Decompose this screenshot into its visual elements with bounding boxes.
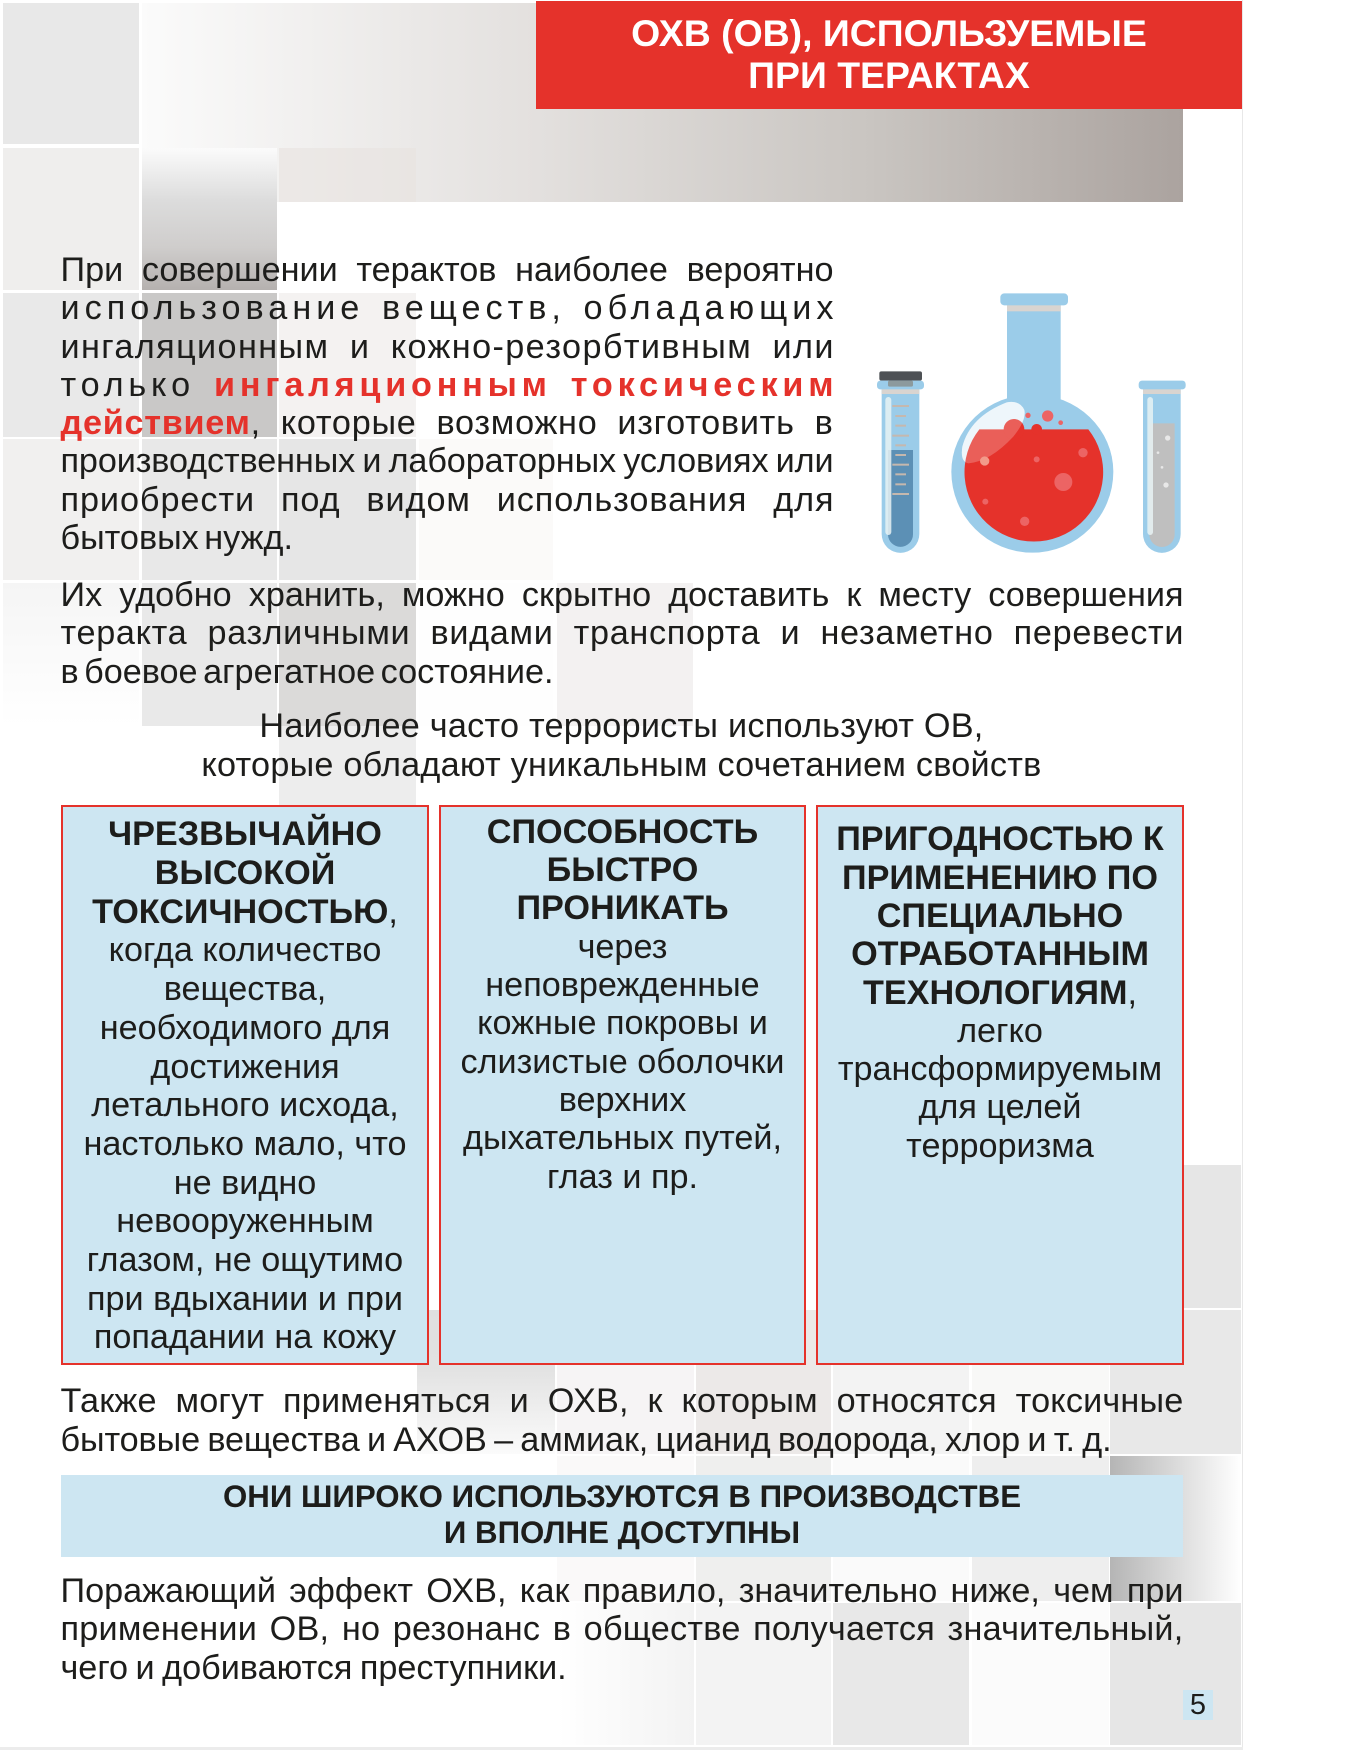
- intro paragraph: только ингаляционным токсическим: [60, 366, 838, 404]
- panel: extreme toxicity: при вдыхании и при: [87, 1280, 403, 1318]
- panel: extreme toxicity: необходимого для: [100, 1009, 390, 1047]
- closing paragraph: чего и добиваются преступники.: [60, 1649, 567, 1687]
- centered statement: [201, 707, 1042, 784]
- panel: suitability for use: трансформируемым: [838, 1050, 1162, 1088]
- panel: extreme toxicity: [61, 805, 429, 1365]
- panel: rapid penetration: БЫСТРО: [547, 851, 698, 889]
- panel: extreme toxicity: когда количество: [109, 931, 381, 969]
- panel: extreme toxicity: невооруженным: [116, 1202, 374, 1240]
- panel: rapid penetration: ПРОНИКАТЬ: [516, 889, 729, 927]
- panel: rapid penetration: кожные покровы и: [477, 1004, 768, 1042]
- panel: rapid penetration: слизистые оболочки: [460, 1043, 785, 1081]
- page number: [1183, 1690, 1213, 1720]
- title banner: ОХВ (ОВ), ИСПОЛЬЗУЕМЫЕ: [631, 12, 1147, 54]
- panel: suitability for use: ПРИГОДНОСТЬЮ К: [836, 820, 1164, 858]
- title banner: [536, 1, 1242, 109]
- page number: 5: [1190, 1689, 1206, 1721]
- household substances paragraph: бытовые вещества и АХОВ – аммиак, цианид водорода, хлор и т. д.: [60, 1421, 1112, 1459]
- panel: rapid penetration: верхних: [559, 1081, 686, 1119]
- intro paragraph: бытовых нужд.: [60, 519, 293, 557]
- intro paragraph: приобрести под видом использования для: [60, 481, 834, 519]
- icon: right test tube: [1139, 381, 1186, 553]
- panel: extreme toxicity: ВЫСОКОЙ: [155, 854, 335, 892]
- panel: extreme toxicity: вещества,: [164, 970, 326, 1008]
- household substances paragraph: Также могут применяться и ОХВ, к которым относятся токсичные: [60, 1382, 1184, 1420]
- centered statement: Наиболее часто террористы используют ОВ,: [259, 707, 984, 745]
- intro paragraph: производственных и лабораторных условиях или: [60, 442, 834, 480]
- storage paragraph: Их удобно хранить, можно скрытно доставить к месту совершения: [60, 576, 1184, 614]
- panel: rapid penetration: [439, 805, 806, 1365]
- storage paragraph: теракта различными видами транспорта и незаметно перевести: [60, 614, 1184, 652]
- panel: extreme toxicity: попадании на кожу: [94, 1318, 396, 1356]
- panel: suitability for use: СПЕЦИАЛЬНО: [877, 897, 1123, 935]
- intro paragraph: ингаляционным и кожно-резорбтивным или: [60, 328, 835, 366]
- icon: round flask with red liquid: [951, 293, 1113, 553]
- closing paragraph: применении ОВ, но резонанс в обществе получается значительный,: [60, 1610, 1184, 1648]
- icon: flask and test tubes: [877, 293, 1186, 553]
- intro paragraph: действием, которые возможно изготовить в: [60, 404, 834, 442]
- panel: suitability for use: для целей: [918, 1088, 1082, 1126]
- panel: suitability for use: легко: [957, 1012, 1043, 1050]
- callout banner: И ВПОЛНЕ ДОСТУПНЫ: [444, 1515, 800, 1550]
- storage paragraph: [60, 576, 1184, 691]
- panel: rapid penetration: через: [578, 928, 667, 966]
- household substances paragraph: [60, 1382, 1184, 1459]
- panel: rapid penetration: неповрежденные: [485, 966, 760, 1004]
- panel: extreme toxicity: глазом, не ощутимо: [87, 1241, 403, 1279]
- panel: suitability for use: ТЕХНОЛОГИЯМ,: [863, 974, 1137, 1012]
- intro paragraph: использование веществ, обладающих: [60, 289, 838, 327]
- panel: rapid penetration: глаз и пр.: [547, 1158, 698, 1196]
- panel: suitability for use: [816, 805, 1184, 1365]
- panel: extreme toxicity: не видно: [174, 1164, 316, 1202]
- panel: extreme toxicity: достижения: [150, 1048, 340, 1086]
- panel: extreme toxicity: летального исхода,: [91, 1086, 399, 1124]
- panel: rapid penetration: дыхательных путей,: [463, 1119, 782, 1157]
- panel: suitability for use: терроризма: [906, 1127, 1094, 1165]
- panel: extreme toxicity: ЧРЕЗВЫЧАЙНО: [108, 815, 382, 853]
- callout banner: ОНИ ШИРОКО ИСПОЛЬЗУЮТСЯ В ПРОИЗВОДСТВЕ: [223, 1479, 1021, 1514]
- panel: extreme toxicity: настолько мало, что: [83, 1125, 407, 1163]
- centered statement: которые обладают уникальным сочетанием свойств: [201, 746, 1042, 784]
- panel: rapid penetration: СПОСОБНОСТЬ: [487, 813, 758, 851]
- closing paragraph: [60, 1572, 1184, 1687]
- panel: suitability for use: ОТРАБОТАННЫМ: [851, 935, 1149, 973]
- storage paragraph: в боевое агрегатное состояние.: [60, 653, 554, 691]
- intro paragraph: [60, 251, 838, 557]
- closing paragraph: Поражающий эффект ОХВ, как правило, значительно ниже, чем при: [60, 1572, 1184, 1610]
- panel: suitability for use: ПРИМЕНЕНИЮ ПО: [842, 859, 1158, 897]
- callout banner: [61, 1475, 1183, 1557]
- intro paragraph: При совершении терактов наиболее вероятно: [60, 251, 834, 289]
- panel: extreme toxicity: ТОКСИЧНОСТЬЮ,: [92, 893, 398, 931]
- title banner: ПРИ ТЕРАКТАХ: [748, 54, 1030, 96]
- icon: left test tube: [877, 371, 924, 553]
